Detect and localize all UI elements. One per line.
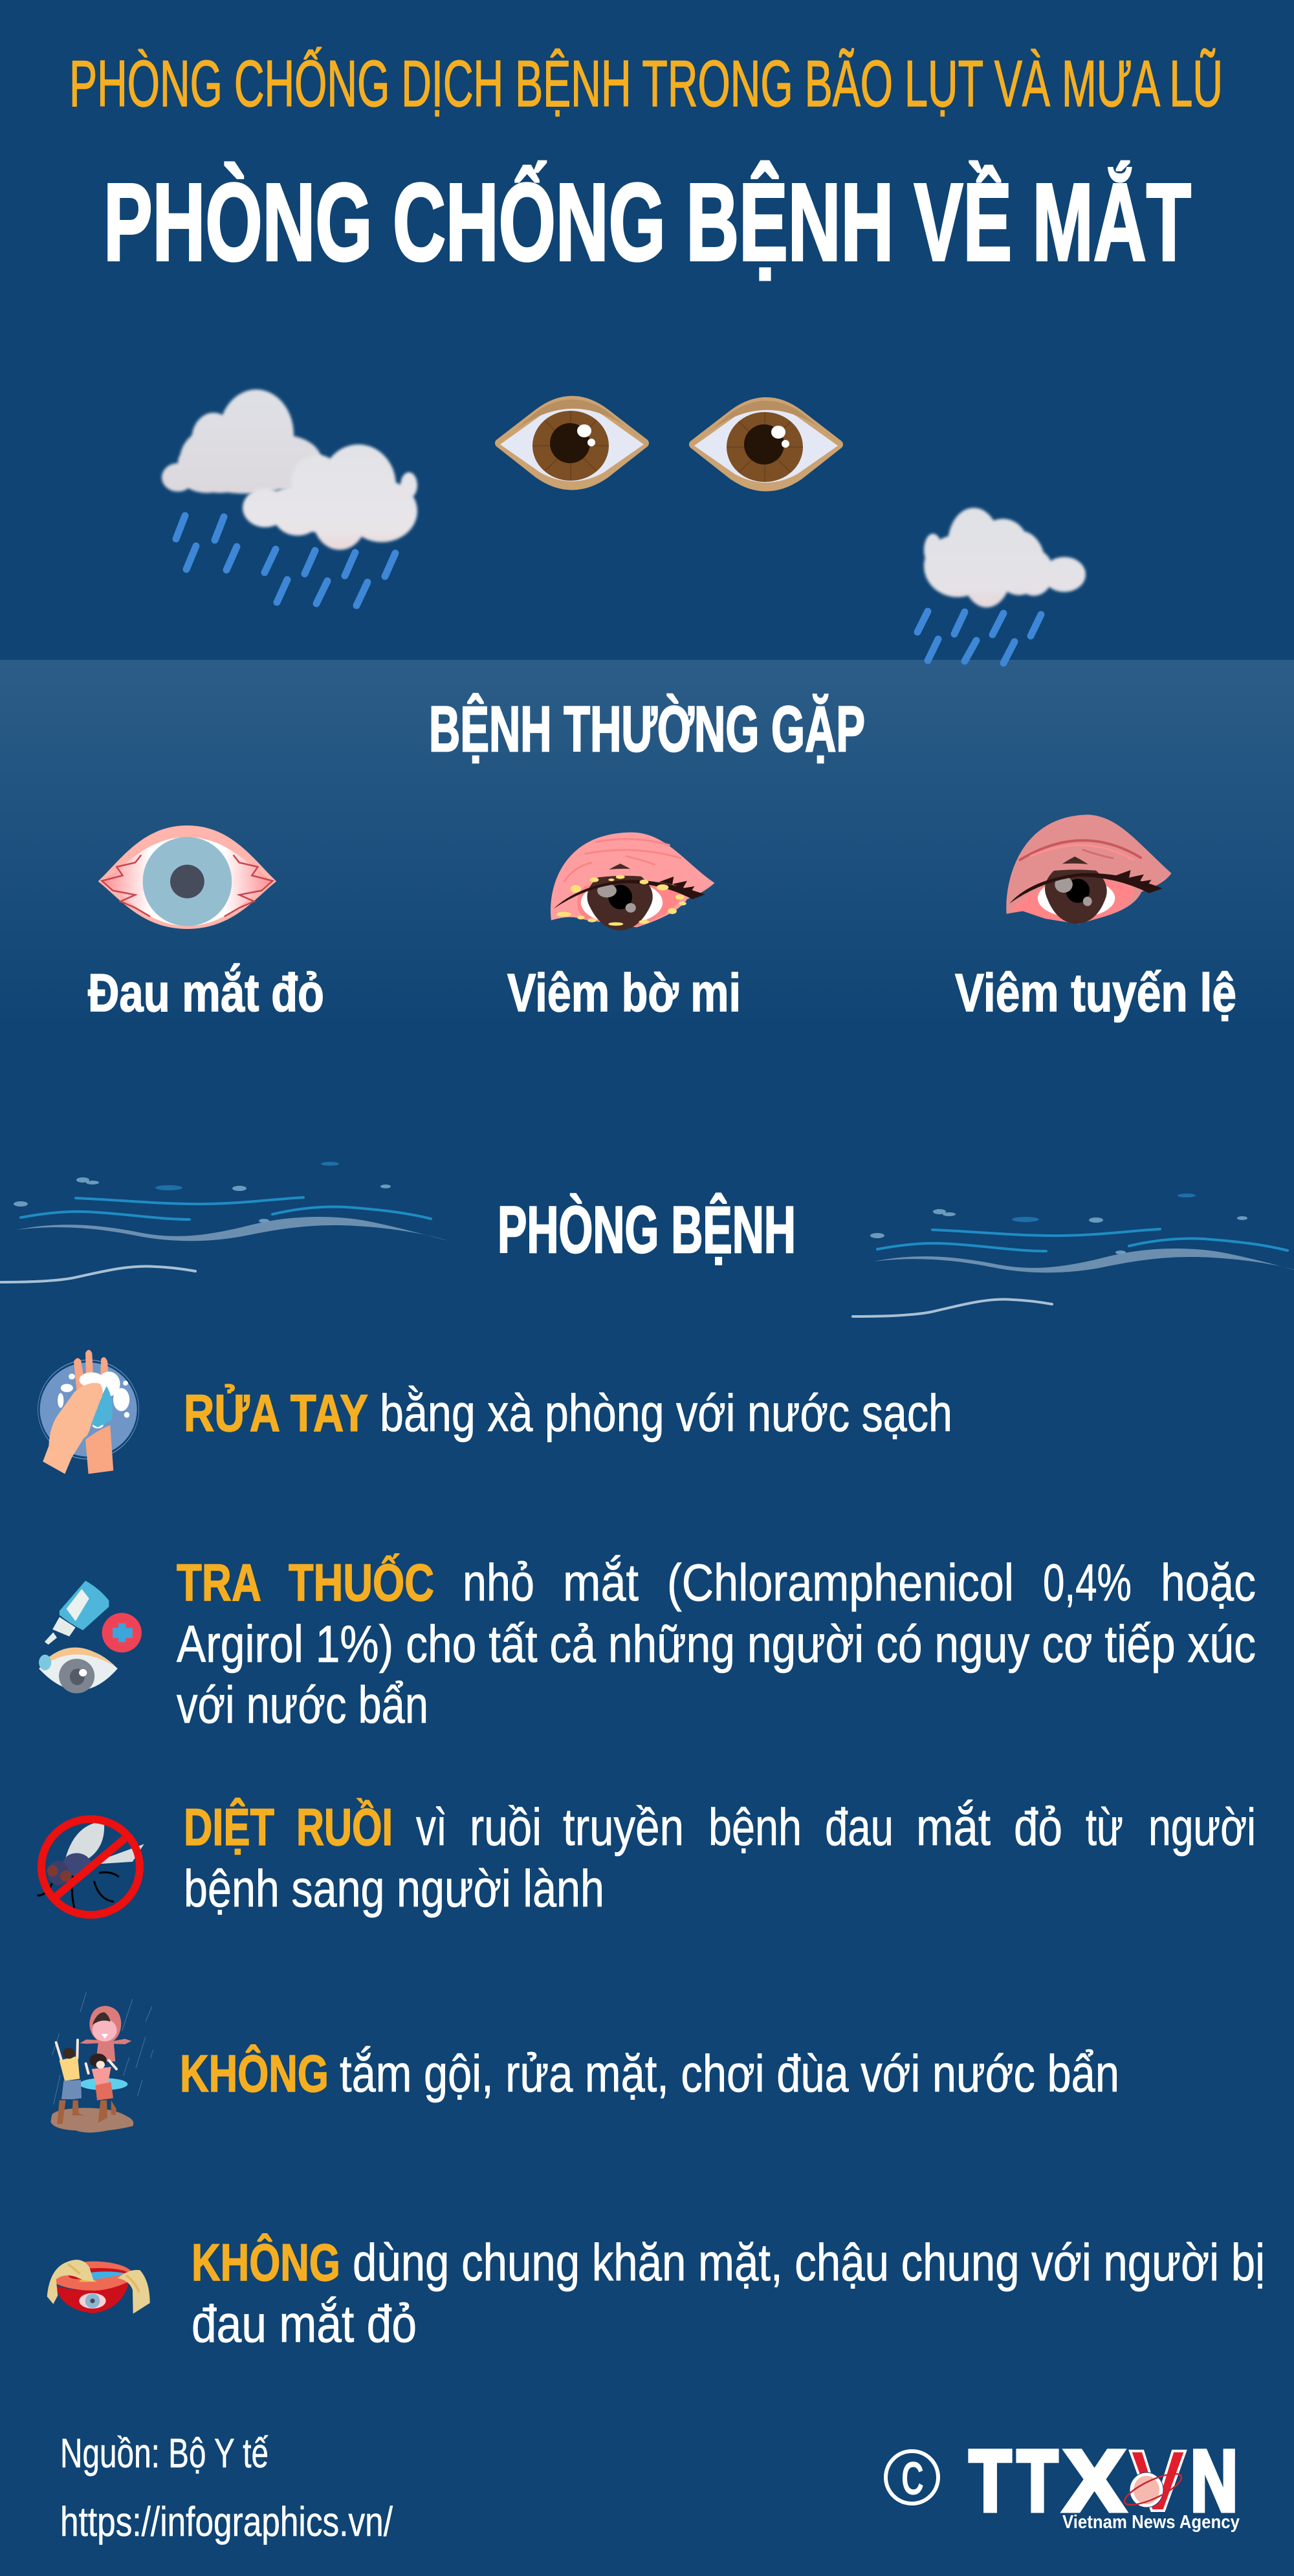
row 5: no shared towels text [192,2233,1265,2353]
row 2: eye drops text: (Chloramphenicol [667,1554,1014,1612]
row 4: no dirty water text: KHÔNG [180,2044,329,2103]
source: Nguồn: Bộ Y tế [60,2430,269,2476]
icon: left rain clouds [162,389,417,606]
row 2: eye drops text: mắt [563,1554,639,1612]
logo: TTXVN copyright: C [901,2453,924,2505]
row 3: kill flies text: bệnh sang người lành [184,1860,604,1918]
logo: TTXVN copyright: V [1130,2433,1186,2529]
row 5: no shared towels text: đau mắt đỏ [192,2295,417,2353]
row 1: wash hands text: bằng xà phòng với nước sạch [380,1384,952,1443]
row 3: kill flies text: từ [1086,1798,1123,1857]
icon: hand washing [38,1350,139,1474]
row 4: no dirty water text: tắm gội, rửa mặt, chơi đùa với nước bẩn [340,2045,1119,2103]
row 2: eye drops text [177,1553,1256,1734]
row 3: kill flies text: mắt [916,1798,991,1857]
row 3: kill flies text [184,1798,1256,1918]
row 3: kill flies text: truyền [563,1798,684,1857]
icon: no flies [37,1819,144,1915]
row 4: no dirty water text [180,2044,1119,2103]
row 5: no shared towels text: KHÔNG [192,2233,340,2292]
label: dacryoadenitis: Viêm tuyến lệ [955,963,1236,1023]
logo: TTXVN copyright: Vietnam News Agency [1062,2512,1240,2533]
icon: lacrimal gland inflammation eye [1006,814,1172,924]
row 2: eye drops text: với nước bẩn [177,1676,428,1734]
row 2: eye drops text: THUỐC [289,1553,434,1612]
logo: TTXVN copyright: T [969,2433,1011,2529]
icon: pair of eyes [499,400,839,486]
row 3: kill flies text: DIỆT [184,1798,274,1857]
waves: left [0,1162,448,1282]
row 3: kill flies text: đau [825,1798,894,1857]
icon: shared basin and towel [47,2260,150,2314]
row 2: eye drops text: nhỏ [463,1554,534,1612]
row 2: eye drops text: hoặc [1161,1554,1256,1612]
row 3: kill flies text: bệnh [708,1798,802,1857]
row 3: kill flies text: đỏ [1014,1798,1062,1857]
logo: TTXVN copyright [886,2433,1240,2533]
icon: children playing in dirty water [50,1992,153,2133]
row 3: kill flies text: người [1148,1798,1256,1857]
icon: red eye [98,825,276,929]
icon: eye drops [39,1581,142,1694]
row 1: wash hands text: RỬA TAY [184,1384,368,1443]
logo: TTXVN copyright: T [1017,2433,1058,2529]
logo: TTXVN copyright: N [1190,2433,1238,2529]
row 1: wash hands text [184,1384,952,1443]
icon: blepharitis eye [551,833,714,930]
row 3: kill flies text: ruồi [470,1798,542,1857]
row 2: eye drops text: 0,4% [1043,1554,1132,1612]
waves: right [853,1194,1294,1316]
label: conjunctivitis: Đau mắt đỏ [88,963,324,1023]
row 3: kill flies text: RUỒI [296,1798,393,1857]
panel: common diseases gradient band [0,660,1294,1029]
logo: TTXVN copyright: X [1064,2433,1125,2529]
row 3: kill flies text: vì [416,1798,447,1857]
icon: right rain cloud [917,508,1086,663]
website: https://infographics.vn/ [60,2498,393,2545]
heading: prevention: PHÒNG BỆNH [498,1193,796,1267]
label: blepharitis: Viêm bờ mi [507,963,741,1023]
heading: common diseases: BỆNH THƯỜNG GẶP [429,693,865,765]
row 2: eye drops text: TRA [177,1554,261,1612]
